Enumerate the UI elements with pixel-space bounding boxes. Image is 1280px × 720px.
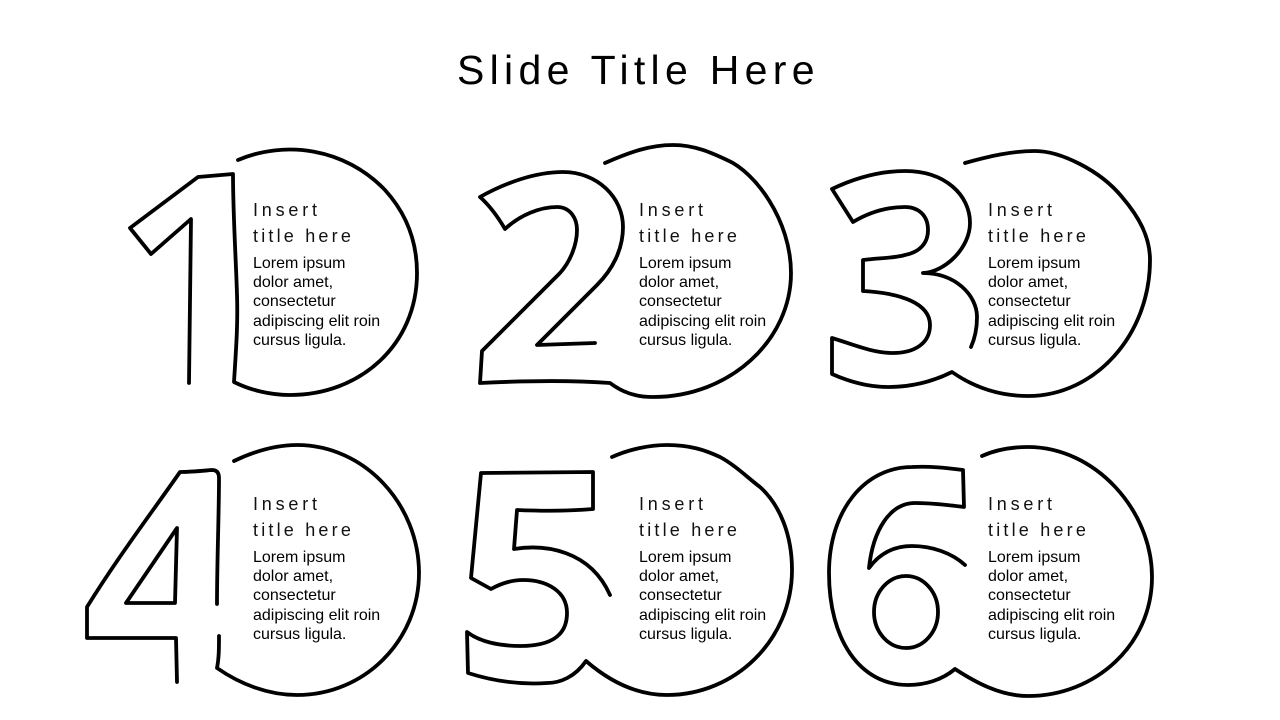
numeral 6 and circle outline [829,447,1152,696]
heading 2: title here [639,226,740,246]
body text 6: dolor amet, [988,568,1068,585]
numeral 6 inner counter [874,576,938,648]
body text 4: Lorem ipsum [253,549,345,566]
panel: number 2 [480,145,791,397]
body text 1: dolor amet, [253,274,333,291]
heading 4: Insert [253,494,321,514]
panel: number 4 [87,445,419,695]
panel: number 6 [829,447,1152,696]
body text 2: cursus ligula. [639,332,732,349]
body text 3: Lorem ipsum [988,255,1080,272]
heading 5: Insert [639,494,707,514]
numeral 1 and circle outline [130,150,417,395]
heading 2: Insert [639,200,707,220]
body text 3: consectetur [988,293,1071,310]
body text 5: Lorem ipsum [639,549,731,566]
body text 4: consectetur [253,587,336,604]
heading 1: title here [253,226,354,246]
body text 3: dolor amet, [988,274,1068,291]
body text 4: cursus ligula. [253,626,346,643]
body text 6: Lorem ipsum [988,549,1080,566]
body text 1: cursus ligula. [253,332,346,349]
body text 2: dolor amet, [639,274,719,291]
panel: number 3 [832,151,1150,396]
body text 6: consectetur [988,587,1071,604]
body text 1: Lorem ipsum [253,255,345,272]
body text 5: adipiscing elit roin [639,607,766,624]
numeral 2 and circle outline [480,145,791,397]
heading 1: Insert [253,200,321,220]
numeral 5 and circle outline [467,445,792,695]
heading 5: title here [639,520,740,540]
body text 2: consectetur [639,293,722,310]
numeral 4 and circle outline [217,445,419,695]
body text 2: adipiscing elit roin [639,313,766,330]
body text 5: consectetur [639,587,722,604]
body text 6: cursus ligula. [988,626,1081,643]
numeral 4 upper stroke [87,470,219,682]
heading 6: Insert [988,494,1056,514]
body text 2: Lorem ipsum [639,255,731,272]
heading 3: Insert [988,200,1056,220]
title: Slide Title Here [457,47,820,93]
numeral 3 and circle outline [832,151,1150,396]
body text 5: cursus ligula. [639,626,732,643]
body text 1: consectetur [253,293,336,310]
panel: number 1 [130,150,417,395]
body text 3: adipiscing elit roin [988,313,1115,330]
heading 6: title here [988,520,1089,540]
panel: number 5 [467,445,792,695]
body text 5: dolor amet, [639,568,719,585]
body text 1: adipiscing elit roin [253,313,380,330]
body text 4: adipiscing elit roin [253,607,380,624]
numeral 4 inner triangle [126,528,177,603]
heading 3: title here [988,226,1089,246]
heading 4: title here [253,520,354,540]
body text 3: cursus ligula. [988,332,1081,349]
body text 6: adipiscing elit roin [988,607,1115,624]
body text 4: dolor amet, [253,568,333,585]
